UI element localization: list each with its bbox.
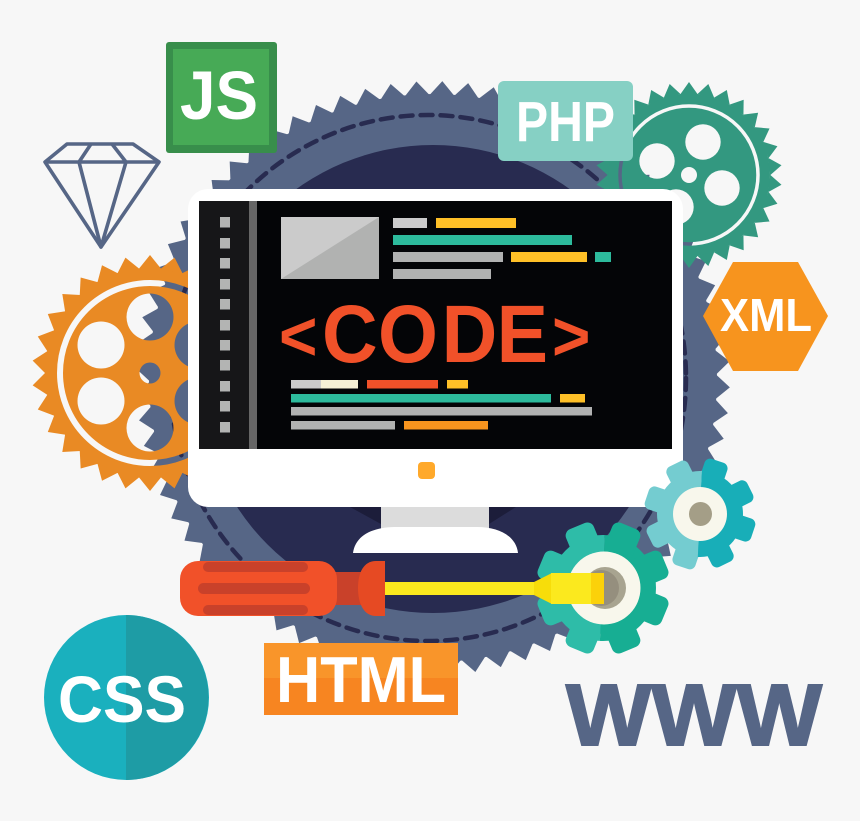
image placeholder [281,217,379,279]
big slate gear [120,65,746,691]
monitor stand [350,505,518,553]
dashed ring [170,115,686,641]
tip [534,573,604,604]
small cyan cog [643,457,757,571]
CODE heading: < [279,298,317,375]
CSS badge: CSS [58,662,186,736]
handle [180,561,337,616]
shaft [385,582,535,595]
grip grooves [198,562,310,615]
JS badge [166,42,277,153]
HTML badge: HTML [276,643,446,716]
CODE heading: D [442,288,497,380]
icon: diamond [45,144,159,247]
CSS badge [44,615,209,780]
sidebar [199,201,257,449]
collar [358,561,385,616]
teal film-reel gear [596,82,782,268]
CODE heading: E [497,288,548,380]
PHP badge [498,81,633,161]
upper code bars [393,218,611,279]
PHP badge: PHP [516,90,615,154]
orange film-reel gear [32,255,188,491]
JS badge: JS [180,57,258,134]
monitor [188,189,683,553]
CODE heading: O [378,288,438,380]
screwdriver [180,561,604,616]
monitor frame [188,189,683,507]
green cog [535,520,671,656]
dark inner disc [199,145,667,613]
lower code bars [291,380,592,430]
XML hexagon badge: XML [720,289,812,341]
CODE heading: C [322,288,378,380]
screen [199,201,672,449]
CODE heading: > [552,298,590,375]
power button [418,462,435,479]
XML hexagon badge [703,262,828,371]
WWW label: WWW [566,667,823,764]
